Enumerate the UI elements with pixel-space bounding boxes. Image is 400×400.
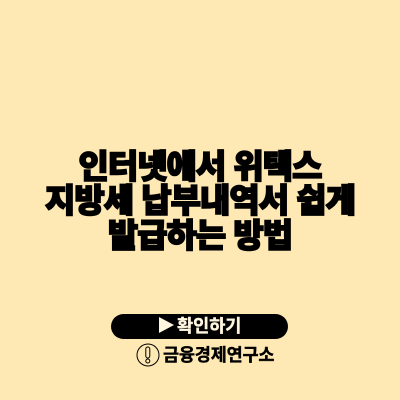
title: 인터넷에서 위택스 xyxy=(78,148,322,185)
brand: exclamation icon and name xyxy=(136,344,274,366)
icon: exclamation circle xyxy=(136,344,160,366)
title: 발급하는 방법 xyxy=(108,217,292,254)
brand name: 금융경제연구소 xyxy=(163,345,274,365)
button label: 확인하기 xyxy=(177,316,241,336)
icon: play triangle xyxy=(159,317,174,333)
button: confirm xyxy=(111,314,288,339)
title xyxy=(44,148,355,254)
title: 지방세 납부내역서 쉽게 xyxy=(45,182,355,219)
